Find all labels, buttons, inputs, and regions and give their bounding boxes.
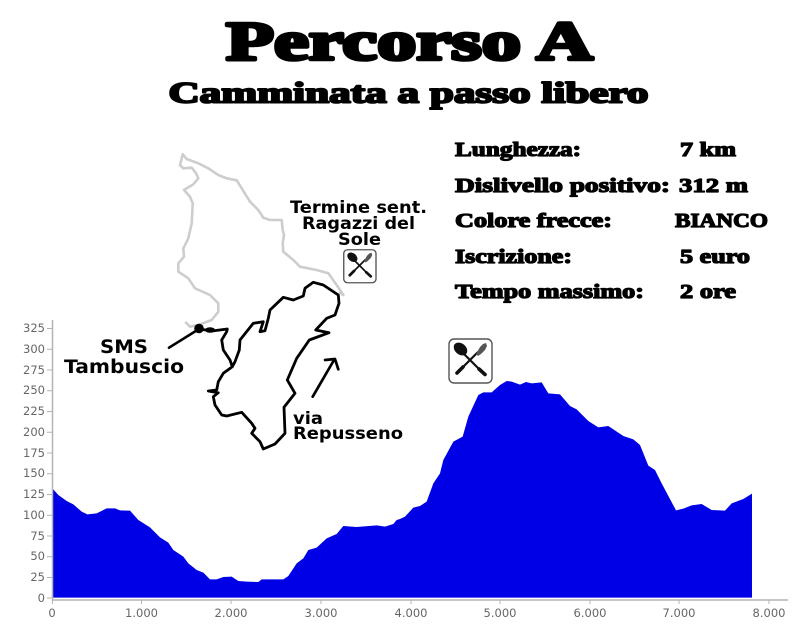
row: positive elevation gain	[455, 175, 748, 197]
subtitle: Camminata a passo libero	[168, 76, 648, 110]
x axis labels: 5.000	[484, 606, 516, 620]
label: via Repusseno	[293, 409, 403, 443]
y axis labels: 225	[23, 404, 45, 418]
title: Percorso A	[226, 10, 593, 72]
x axis labels	[48, 606, 785, 620]
y axis labels: 150	[23, 466, 45, 480]
y axis labels: 50	[30, 549, 45, 563]
y axis labels: 175	[23, 446, 45, 460]
row: length: Lunghezza:	[455, 139, 581, 161]
label: Termine sent. Ragazzi del Sole: Termine sent.	[290, 198, 427, 217]
y axis labels: 25	[30, 570, 45, 584]
label: Termine sent. Ragazzi del Sole: Sole	[338, 230, 381, 249]
y axis labels: 250	[23, 383, 45, 397]
label: via Repusseno: via	[293, 409, 323, 428]
x axis labels: 6.000	[574, 606, 606, 620]
y axis labels: 100	[23, 508, 45, 522]
elevation chart	[23, 320, 788, 620]
label: Termine sent. Ragazzi del Sole: Ragazzi del	[302, 214, 415, 233]
label: SMS Tambuscio: SMS	[100, 337, 148, 358]
info panel: route details	[455, 139, 768, 303]
y axis labels: 275	[23, 363, 45, 377]
y axis labels: 125	[23, 487, 45, 501]
x axis labels: 0	[48, 606, 56, 620]
row: registration: Iscrizione:	[455, 246, 572, 268]
x axis labels: 3.000	[305, 606, 337, 620]
row: maximum time: Tempo massimo:	[455, 281, 644, 303]
row: arrow colour	[455, 210, 768, 232]
row: positive elevation gain: 312 m	[679, 175, 748, 197]
start marker	[169, 324, 215, 348]
icon: restaurant on map	[344, 250, 376, 283]
black route	[199, 282, 339, 449]
row: length: 7 km	[680, 139, 736, 161]
label: via Repusseno: Repusseno	[293, 424, 403, 443]
y axis labels: 200	[23, 425, 45, 439]
elevation area	[52, 381, 752, 598]
row: arrow colour: Colore frecce:	[455, 210, 612, 232]
row: maximum time	[455, 281, 736, 303]
x axis labels: 8.000	[753, 606, 785, 620]
row: registration: 5 euro	[680, 246, 750, 268]
y axis labels	[23, 321, 45, 605]
x axis labels: 2.000	[215, 606, 247, 620]
grey route	[178, 154, 343, 327]
y axis labels: 0	[38, 591, 45, 605]
route map	[169, 154, 343, 449]
label: SMS Tambuscio: Tambuscio	[64, 357, 184, 378]
row: length	[455, 139, 736, 161]
y axis labels: 300	[23, 342, 45, 356]
label: Termine sent. Ragazzi del Sole	[290, 198, 427, 249]
x axis labels: 1.000	[125, 606, 158, 620]
label: SMS Tambuscio	[64, 337, 184, 378]
direction arrow	[313, 359, 338, 397]
icon: restaurant on profile	[449, 339, 492, 383]
x axis labels: 4.000	[395, 606, 427, 620]
axes	[47, 320, 788, 604]
row: registration	[455, 246, 750, 268]
row: arrow colour: BIANCO	[675, 210, 768, 232]
y axis labels: 75	[30, 529, 45, 543]
x axis labels: 7.000	[663, 606, 695, 620]
row: maximum time: 2 ore	[680, 281, 736, 303]
row: positive elevation gain: Dislivello positivo:	[455, 175, 670, 197]
y axis labels: 325	[23, 321, 45, 335]
